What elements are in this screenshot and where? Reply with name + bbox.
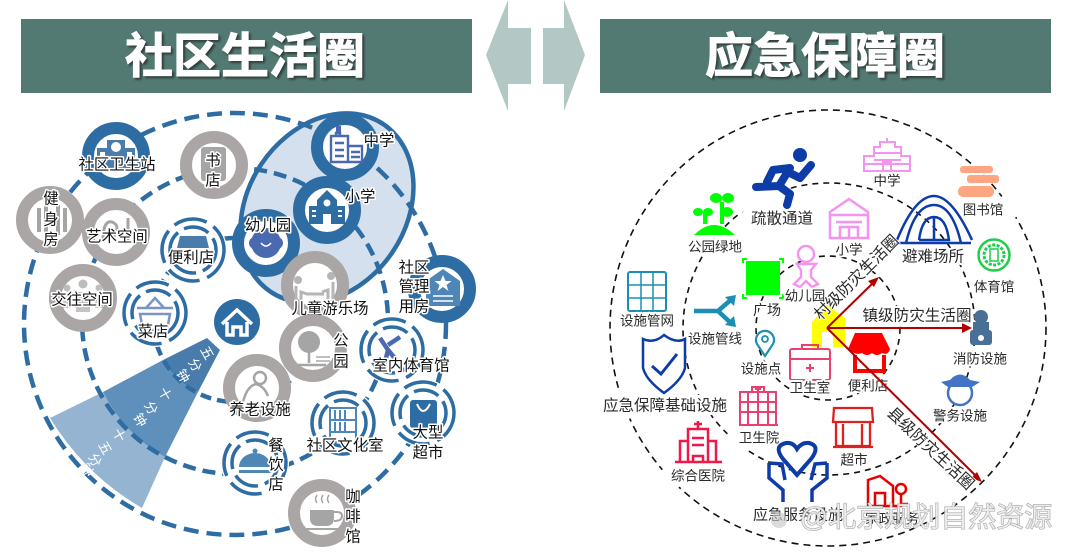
icon: 幼儿园 baby: 幼儿园	[785, 288, 825, 304]
node: 社区文化室: 社区文化室	[307, 436, 383, 454]
node: 儿童游乐场: 儿童游乐场	[292, 298, 368, 318]
icon: 消防设施: 消防设施	[953, 352, 1007, 366]
node: 小学	[299, 182, 375, 238]
icon: 应急保障基础设施 shield	[603, 335, 727, 414]
node: 书店	[186, 137, 242, 193]
label: 村级防灾生活圈: 村级防灾生活圈	[811, 232, 903, 324]
icon: 设施管网	[620, 272, 674, 328]
icon: 卫生室: 卫生室	[790, 380, 830, 396]
node: 艺术空间: 艺术空间	[86, 228, 148, 246]
node: 健身房	[22, 190, 78, 248]
node: 社区卫生站	[79, 128, 155, 184]
node: 养老设施: 养老设施	[229, 400, 291, 418]
wedge labels: 五	[95, 439, 115, 457]
node: 社区管理用房: 管理	[399, 278, 429, 296]
wedge labels: 分	[141, 399, 161, 417]
icon: 设施点	[741, 331, 781, 376]
node: 艺术空间	[86, 204, 148, 260]
node: 咖啡馆: 咖	[345, 488, 361, 506]
node: 大型超市	[389, 379, 457, 462]
node: 养老设施	[229, 360, 291, 418]
header: 应急保障圈	[600, 19, 1051, 93]
icon: 应急保障基础设施 shield: 应急保障基础设施	[603, 396, 727, 414]
node: 大型超市: 大型	[413, 424, 443, 442]
icon: 疏散通道 runner: 疏散通道	[751, 210, 813, 228]
icon: 中学	[864, 138, 910, 188]
header: 社区生活圈: 社区生活圈	[125, 30, 365, 84]
panel: community life circle	[22, 80, 470, 545]
node: 健身房: 房	[43, 230, 59, 248]
icon: 便利店	[848, 333, 890, 394]
node: 书店: 书	[205, 152, 221, 170]
node: 幼儿园	[238, 215, 294, 271]
icon: 广场	[743, 259, 783, 318]
node: 菜店	[121, 279, 189, 347]
panel: emergency protection circle	[603, 110, 1046, 546]
node: home	[214, 299, 260, 345]
node: 公园: 公	[333, 332, 349, 350]
watermark: 北京规划自然资源: @北京规划自然资源	[800, 502, 1052, 532]
node: 中学	[317, 119, 394, 175]
header: 社区生活圈	[21, 19, 472, 93]
node: 交往空间	[51, 270, 113, 326]
icon: 公园绿地: 公园绿地	[688, 240, 742, 254]
node: 便利店: 便利店	[168, 248, 214, 266]
node: 室内体育馆: 室内体育馆	[373, 356, 449, 374]
header: 应急保障圈: 应急保障圈	[705, 30, 945, 84]
node: 咖啡馆: 啡	[345, 508, 361, 526]
node: 健身房: 身	[43, 210, 59, 228]
icon: yellow centre marker	[812, 305, 845, 347]
icon: 设施管线: 设施管线	[688, 332, 742, 346]
node: 菜店: 菜店	[138, 322, 168, 340]
icon: 超市: 超市	[840, 452, 868, 468]
node: 便利店	[159, 216, 227, 284]
icon: 警务设施: 警务设施	[933, 408, 987, 424]
node: 餐饮店: 餐	[268, 436, 284, 454]
icon: 小学	[830, 199, 868, 258]
icon: 疏散通道 runner	[751, 148, 813, 228]
node: 咖啡馆: 馆	[345, 528, 361, 546]
icon: 卫生院	[739, 386, 780, 446]
icon: 卫生室	[790, 345, 830, 396]
icon: 体育馆: 体育馆	[974, 280, 1014, 294]
node: 公园	[285, 320, 349, 376]
arrows: protection radii	[827, 277, 982, 482]
icon: 避难场所 tent: 避难场所	[902, 248, 964, 266]
icon: 小学: 小学	[836, 242, 862, 258]
node: 小学: 小学	[345, 188, 375, 206]
icon: red house: 家政服务	[865, 510, 919, 526]
icon: 公园绿地	[688, 193, 742, 254]
node: 餐饮店	[221, 429, 289, 497]
icon: 中学: 中学	[874, 174, 900, 188]
node: 公园: 园	[333, 354, 349, 370]
wedge: walking time sectors	[50, 338, 220, 508]
icon: red house	[865, 476, 919, 526]
icon: 设施管线	[688, 295, 742, 346]
icon: 卫生院: 卫生院	[739, 430, 780, 446]
icon: 超市	[833, 408, 873, 468]
icon: 广场: 广场	[753, 302, 781, 318]
icon: 体育馆	[974, 240, 1014, 294]
node: 社区管理用房: 用房	[399, 298, 429, 316]
wedge labels: 分	[85, 451, 105, 469]
node: 室内体育馆	[358, 316, 449, 384]
icon: 避难场所 tent	[896, 196, 972, 266]
wedge labels: 钟	[77, 461, 97, 479]
node: 幼儿园: 幼儿园	[245, 216, 291, 234]
icon: 幼儿园 baby	[785, 246, 825, 304]
node: 儿童游乐场	[287, 257, 368, 318]
dashed rings: 5, 10 and 15 minute	[24, 113, 446, 535]
node: 交往空间: 交往空间	[51, 290, 113, 308]
icon: 图书馆	[958, 166, 1003, 218]
label: 县级防灾生活圈: 县级防灾生活圈	[883, 404, 977, 493]
icon: 便利店: 便利店	[848, 378, 888, 394]
icon: 应急服务设施	[753, 443, 843, 524]
icon: 警务设施	[933, 374, 987, 424]
node: 咖啡馆	[294, 485, 361, 546]
dashed rings: village, town and county	[610, 110, 1046, 546]
label: 镇级防灾生活圈: 镇级防灾生活圈	[862, 306, 972, 324]
node: 社区管理用房: 社区	[399, 258, 429, 276]
wedge labels: 五	[197, 344, 217, 362]
icon: 消防设施	[953, 310, 1007, 366]
arrow: double arrow between headers	[486, 0, 585, 111]
icon: 设施点: 设施点	[741, 362, 781, 376]
school zone ellipse	[205, 80, 449, 336]
node: 大型超市: 超市	[413, 444, 443, 462]
node: 社区卫生站: 社区卫生站	[79, 156, 155, 174]
wedge labels: 钟	[130, 411, 150, 429]
node: 健身房: 健	[43, 190, 59, 208]
node: 餐饮店: 店	[268, 476, 284, 494]
wedge labels: 分	[185, 356, 205, 374]
wedge labels: 十	[155, 385, 175, 403]
icon: 应急服务设施: 应急服务设施	[753, 506, 843, 524]
node: 社区文化室	[307, 389, 383, 457]
wedge labels: 钟	[173, 367, 193, 385]
icon: 设施管网: 设施管网	[620, 314, 674, 328]
node: 社区管理用房	[399, 258, 470, 317]
icon: 综合医院	[671, 421, 725, 484]
node: 书店: 店	[205, 172, 221, 190]
wedge labels	[77, 344, 217, 479]
icon: 图书馆: 图书馆	[963, 202, 1003, 218]
node: 餐饮店: 饮	[268, 456, 284, 474]
wedge labels: 十	[109, 426, 129, 444]
icon: 综合医院: 综合医院	[671, 468, 725, 484]
node: 中学: 中学	[364, 132, 394, 150]
